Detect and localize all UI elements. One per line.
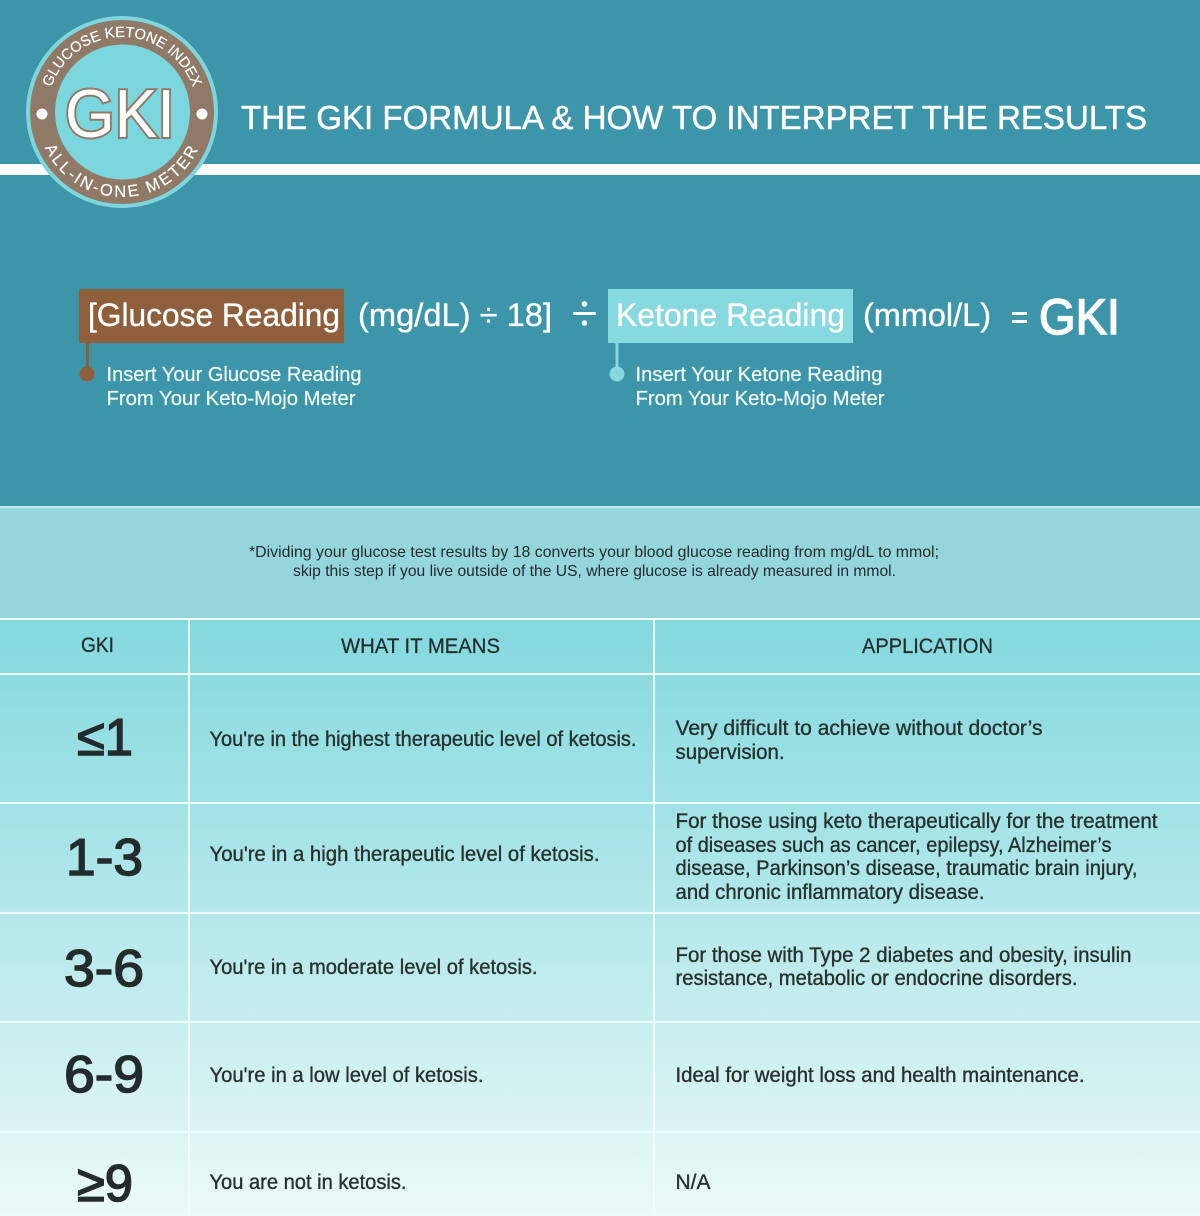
ketone callout: Insert Your Ketone Reading xyxy=(636,363,882,386)
row: GKI at least 9: ≥9 xyxy=(77,1155,133,1213)
table header: GKI xyxy=(81,633,114,657)
glucose callout: Insert Your Glucose Reading xyxy=(106,363,362,386)
row: GKI 3-6 xyxy=(64,940,1132,998)
row: GKI at least 9: N/A xyxy=(676,1171,710,1194)
logo badge: GKI: GKI xyxy=(65,76,175,152)
row: GKI 6-9 xyxy=(64,1046,1084,1104)
GKI table xyxy=(0,618,1200,1216)
divide sign xyxy=(573,301,596,326)
row: GKI at most 1: ≤1 xyxy=(77,709,133,767)
glucose callout: From Your Keto-Mojo Meter xyxy=(106,387,356,410)
footnote text xyxy=(249,544,939,580)
ketone unit: (mmol/L) xyxy=(863,297,991,333)
row: GKI 1-3: and chronic inflammatory disease. xyxy=(676,881,984,904)
glucose callout xyxy=(80,343,362,410)
footnote text: skip this step if you live outside of the US, where glucose is already measured in mmol. xyxy=(293,563,896,580)
row: GKI at most 1 xyxy=(77,709,1042,767)
header background xyxy=(0,0,1200,507)
row: GKI 6-9: 6-9 xyxy=(64,1046,144,1104)
table header xyxy=(81,633,993,658)
row: GKI at most 1: You're in the highest therapeutic level of ketosis. xyxy=(210,728,636,751)
row: GKI 1-3: disease, Parkinson’s disease, traumatic brain injury, xyxy=(676,857,1138,880)
equals sign xyxy=(1012,312,1027,323)
glucose reading box xyxy=(79,289,344,343)
row: GKI 3-6: For those with Type 2 diabetes and obesity, insulin xyxy=(676,944,1132,967)
ketone callout xyxy=(610,343,885,410)
row: GKI 6-9: Ideal for weight loss and health maintenance. xyxy=(676,1064,1084,1087)
table header: WHAT IT MEANS xyxy=(341,634,500,658)
ketone reading box: Ketone Reading xyxy=(616,297,845,333)
row: GKI at least 9: You are not in ketosis. xyxy=(210,1171,406,1194)
row: GKI at least 9 xyxy=(77,1155,710,1213)
row: GKI 3-6: resistance, metabolic or endocrine disorders. xyxy=(676,967,1078,990)
logo badge: GKI: ALL-IN-ONE METER xyxy=(44,146,198,197)
ketone callout: From Your Keto-Mojo Meter xyxy=(636,387,885,410)
GKI result: GKI xyxy=(1039,289,1120,345)
logo badge: GKI xyxy=(26,16,218,208)
row: GKI 1-3: You're in a high therapeutic level of ketosis. xyxy=(210,843,600,866)
formula xyxy=(79,289,1120,345)
glucose reading box: [Glucose Reading xyxy=(88,297,340,333)
logo badge: GKI: GLUCOSE KETONE INDEX xyxy=(43,26,202,88)
row: GKI 1-3: For those using keto therapeutically for the treatment xyxy=(676,810,1158,833)
footnote text: *Dividing your glucose test results by 18 converts your blood glucose reading from mg/dL to mmol; xyxy=(249,544,939,561)
title: THE GKI FORMULA & HOW TO INTERPRET THE RESULTS xyxy=(241,100,1147,137)
row: GKI 3-6: 3-6 xyxy=(64,940,144,998)
row: GKI at most 1: Very difficult to achieve without doctor’s xyxy=(676,717,1042,740)
header white stripe xyxy=(0,164,1200,175)
footnote band xyxy=(0,506,1200,620)
row: GKI 1-3: of diseases such as cancer, epilepsy, Alzheimer’s xyxy=(676,834,1112,857)
table header: APPLICATION xyxy=(862,634,993,658)
row: GKI 3-6: You're in a moderate level of ketosis. xyxy=(210,956,538,979)
glucose unit and divide by 18: (mg/dL) ÷ 18] xyxy=(358,297,552,333)
ketone reading box xyxy=(608,289,853,343)
row: GKI 1-3 xyxy=(66,810,1158,904)
row: GKI 6-9: You're in a low level of ketosis. xyxy=(210,1064,484,1087)
row: GKI at most 1: supervision. xyxy=(676,741,784,764)
row: GKI 1-3: 1-3 xyxy=(66,829,143,887)
